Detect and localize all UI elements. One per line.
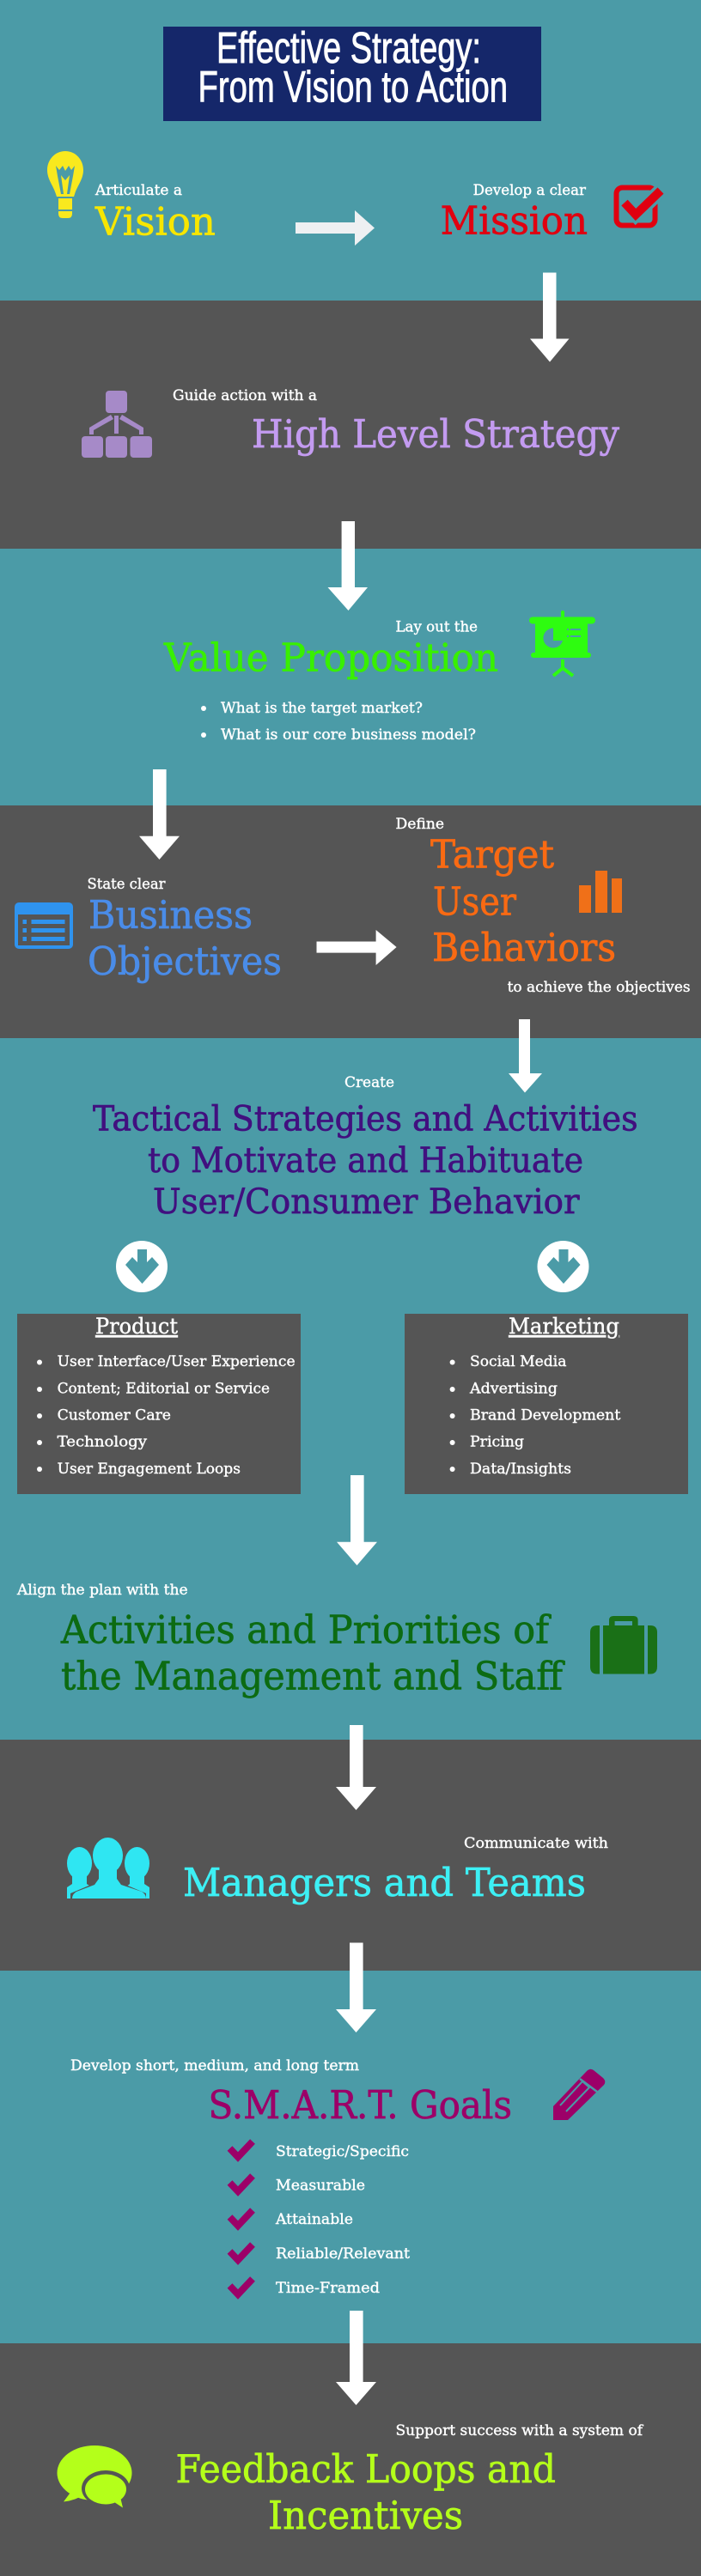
- item: strategic: Strategic/Specific: [276, 2143, 409, 2160]
- icon: circled arrow right: [538, 1241, 589, 1292]
- item: time-framed: Time-Framed: [276, 2280, 380, 2297]
- text: target user behaviors: to achieve the objectives: [508, 979, 691, 996]
- arrow: behaviors to tactics: [509, 1019, 542, 1092]
- text: develop a clear mission: Mission: [441, 197, 588, 244]
- text: tactical strategies heading: Create: [344, 1074, 394, 1091]
- text: develop a clear mission: Develop a clear: [473, 182, 587, 199]
- icon: circled arrow left: [116, 1241, 168, 1292]
- text: business objectives: State clear: [88, 876, 166, 893]
- item: measurable: [230, 2176, 365, 2194]
- text: smart goals heading: [70, 2057, 512, 2128]
- arrow: tactics to activities: [337, 1475, 377, 1565]
- text: value proposition: Lay out the: [395, 619, 478, 636]
- list: value proposition questions: [201, 700, 476, 744]
- item: measurable: Measurable: [276, 2177, 365, 2194]
- arrow: mission to strategy: [530, 273, 569, 362]
- list: marketing items: Brand Development: [470, 1407, 620, 1425]
- item: reliable: [230, 2245, 410, 2263]
- text: activities and priorities: the Management and Staff: [61, 1653, 565, 1698]
- icon: presentation board: [529, 611, 595, 676]
- icon: org chart: [82, 391, 152, 458]
- arrow: strategy to value proposition: [328, 521, 368, 611]
- list: smart criteria: [230, 2142, 410, 2297]
- icon: checked box: [617, 187, 661, 225]
- text: business objectives: Objectives: [88, 939, 282, 984]
- icon: team of people: [67, 1838, 149, 1899]
- text: activities and priorities: [16, 1582, 565, 1698]
- arrow: objectives to behaviors: [316, 930, 397, 965]
- list: marketing items: [450, 1353, 620, 1478]
- panel: product: [17, 1314, 301, 1494]
- text: managers and teams: [183, 1835, 608, 1905]
- item: reliable: Reliable/Relevant: [276, 2245, 410, 2263]
- panel: marketing: [405, 1314, 688, 1494]
- heading: product: Product: [95, 1314, 178, 1339]
- list: marketing items: Advertising: [469, 1381, 558, 1398]
- icon: list window: [15, 902, 73, 949]
- icon: briefcase: [590, 1616, 657, 1674]
- text: smart goals heading: S.M.A.R.T. Goals: [208, 2082, 512, 2128]
- arrow: managers to goals: [336, 1942, 376, 2032]
- arrow: goals to feedback: [336, 2311, 376, 2405]
- arrow: value proposition to objectives: [139, 769, 180, 860]
- text: target user behaviors: User: [433, 879, 516, 925]
- list: marketing items: Social Media: [470, 1353, 566, 1370]
- text: tactical strategies heading: to Motivate and Habituate: [148, 1141, 583, 1181]
- text: tactical strategies heading: Tactical Strategies and Activities: [93, 1099, 638, 1139]
- text: business objectives: Business: [88, 892, 253, 938]
- title: Effective Strategy:: [216, 23, 481, 72]
- icon: pencil: [553, 2069, 605, 2120]
- icon: bar chart: [579, 871, 622, 913]
- text: business objectives: [88, 876, 282, 984]
- text: activities and priorities: Activities and Priorities of: [60, 1607, 552, 1652]
- arrow: activities to managers: [336, 1725, 376, 1810]
- text: feedback loops and incentives: Incentives: [268, 2493, 463, 2538]
- text: tactical strategies heading: [93, 1074, 638, 1222]
- heading: marketing: Marketing: [509, 1314, 619, 1339]
- list: marketing items: Pricing: [470, 1434, 524, 1451]
- list: value proposition questions: What is the target market?: [221, 700, 423, 717]
- text: activities and priorities: Align the plan with the: [16, 1582, 188, 1599]
- text: value proposition: Value Proposition: [163, 635, 498, 681]
- list: product items: Customer Care: [58, 1407, 171, 1425]
- text: articulate a vision: Articulate a: [94, 182, 182, 199]
- text: feedback loops and incentives: [175, 2422, 644, 2538]
- item: strategic: [230, 2142, 409, 2160]
- icon: light bulb: [47, 151, 83, 218]
- title: From Vision to Action: [198, 62, 508, 112]
- list: product items: Content; Editorial or Service: [58, 1381, 270, 1398]
- icon: chat bubbles: [57, 2445, 132, 2507]
- text: smart goals heading: Develop short, medium, and long term: [70, 2057, 359, 2075]
- text: managers and teams: Managers and Teams: [183, 1860, 586, 1905]
- list: product items: User Engagement Loops: [58, 1461, 241, 1478]
- text: target user behaviors: Target: [430, 831, 554, 878]
- list: product items: User Interface/User Experience: [58, 1353, 296, 1370]
- text: target user behaviors: [395, 816, 691, 996]
- text: articulate a vision: Vision: [94, 199, 216, 244]
- list: product items: Technology: [58, 1434, 147, 1451]
- text: high level strategy: High Level Strategy: [252, 411, 620, 457]
- text: target user behaviors: Define: [395, 816, 444, 833]
- item: attainable: [230, 2210, 353, 2228]
- text: high level strategy: Guide action with a: [173, 387, 317, 404]
- list: product items: [37, 1353, 296, 1478]
- text: feedback loops and incentives: Feedback Loops and: [175, 2446, 556, 2492]
- text: feedback loops and incentives: Support success with a system of: [395, 2422, 644, 2439]
- arrow: vision to mission: [296, 210, 375, 246]
- text: target user behaviors: Behaviors: [432, 925, 616, 970]
- item: time-framed: [230, 2279, 380, 2297]
- list: value proposition questions: What is our core business model?: [221, 726, 476, 744]
- text: high level strategy: [173, 387, 620, 457]
- item: attainable: Attainable: [275, 2211, 353, 2228]
- list: marketing items: Data/Insights: [470, 1461, 571, 1478]
- title: [163, 23, 541, 121]
- text: tactical strategies heading: User/Consumer Behavior: [153, 1182, 580, 1222]
- text: managers and teams: Communicate with: [464, 1835, 608, 1852]
